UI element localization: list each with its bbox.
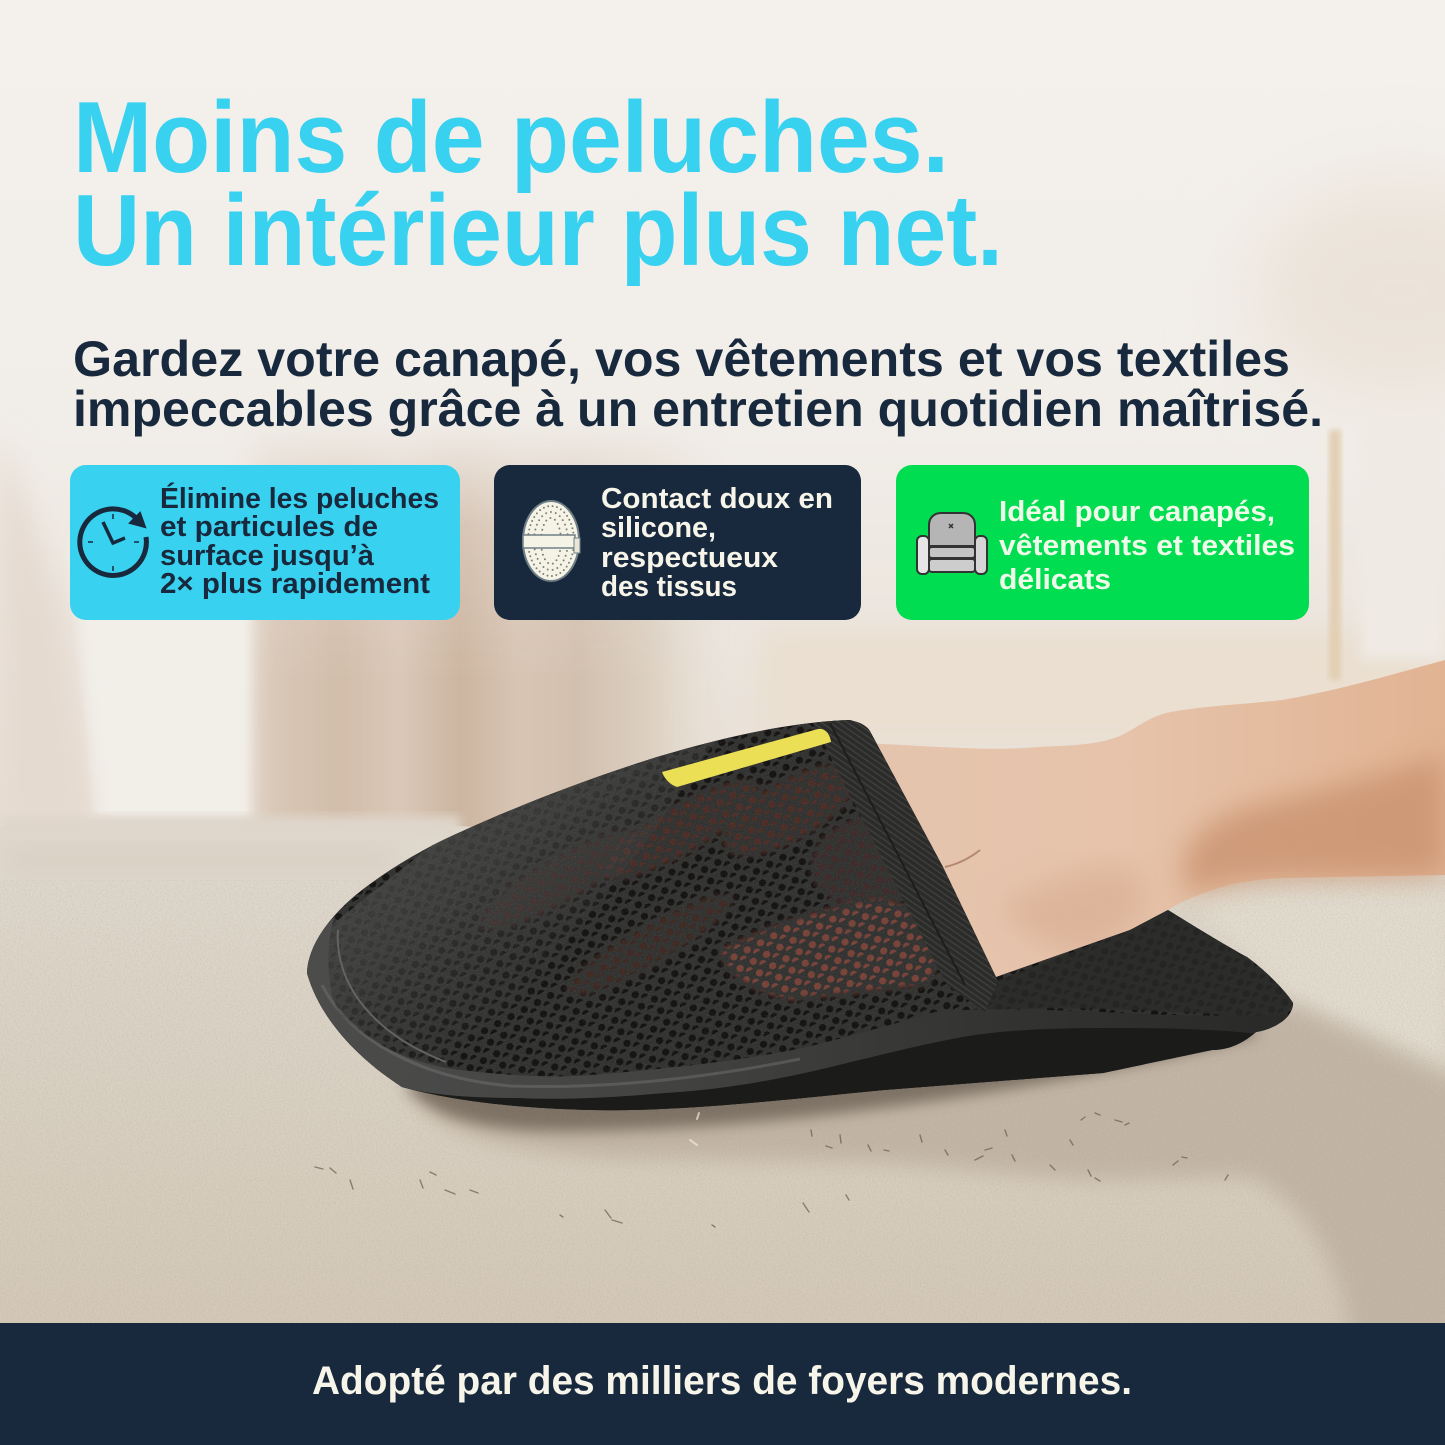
- panel: ideal for textiles: [896, 465, 1309, 620]
- panel: faster removal: [70, 465, 460, 620]
- subtitle: [73, 331, 1323, 437]
- curtain: pale panel: [70, 540, 250, 820]
- back palm knit texture: [985, 910, 1295, 1020]
- title: Un intérieur plus net.: [73, 175, 1003, 287]
- sofa seat: [0, 826, 1445, 1323]
- icon: armchair: [917, 513, 987, 574]
- wall: right beige band: [760, 630, 1445, 740]
- yellow tab on mitt: [662, 729, 831, 787]
- text: benefit 2: silicone,: [601, 512, 716, 544]
- hand and forearm: [860, 660, 1445, 978]
- sole: [400, 1028, 1272, 1110]
- hand crease: [945, 850, 980, 867]
- text: benefit 1: surface jusqu’à: [160, 540, 375, 572]
- hem stitch line: [830, 723, 965, 985]
- subtitle: Gardez votre canapé, vos vêtements et vos textiles: [73, 331, 1290, 387]
- sofa: right bright area: [1180, 890, 1445, 1060]
- panel: soft silicone: [494, 465, 861, 620]
- window frame post: [1329, 430, 1341, 680]
- sofa: fabric grain: [0, 880, 1445, 1323]
- dense knit on upper left: [300, 735, 720, 1070]
- sofa: soft seat edge: [0, 816, 460, 840]
- rim sheen: [322, 985, 800, 1087]
- text: benefit 2: respectueux: [601, 542, 778, 574]
- arm outline: [860, 660, 1445, 978]
- footer banner: [0, 1323, 1445, 1445]
- subtitle: impeccables grâce à un entretien quotidien maîtrisé.: [73, 381, 1323, 437]
- rim stitch line: [338, 930, 446, 1062]
- text: benefit 1: Élimine les peluches: [160, 481, 439, 515]
- text: benefit 2: des tissus: [601, 571, 737, 603]
- lint specks on sofa: [315, 1113, 1228, 1227]
- wall: right upper beige tone: [1250, 180, 1445, 400]
- icon: clock with arrow: [80, 509, 146, 575]
- knit texture: [330, 723, 1019, 1076]
- hem band: [813, 718, 998, 1012]
- background photo: blurred room: [0, 177, 1445, 1323]
- curtain: warm folds: [251, 437, 697, 827]
- mitt base: [300, 710, 1300, 1120]
- text: benefit 3: Idéal pour canapés,: [999, 496, 1275, 528]
- wall: left shadow: [0, 430, 92, 825]
- sofa: band under edge: [0, 845, 400, 875]
- back palm panel: [985, 910, 1295, 1020]
- text: benefit 1: et particules de: [160, 511, 378, 543]
- title: Moins de peluches.: [73, 82, 949, 194]
- mitt cast shadow on sofa: [400, 1005, 1445, 1340]
- text: benefit 3: vêtements et textiles: [999, 530, 1295, 562]
- palm heel shading: [1000, 867, 1144, 953]
- rim binding: [307, 918, 1295, 1099]
- mesh holes: [300, 710, 1300, 1120]
- title: [73, 82, 1003, 287]
- mitt contact shadow: [405, 1020, 1260, 1131]
- wall: right pale glow: [1360, 420, 1445, 660]
- text: benefit 1: [160, 481, 439, 600]
- fingers visible through mesh: [482, 763, 938, 1004]
- forearm underside shading: [1183, 755, 1445, 895]
- text: benefit 3: délicats: [999, 564, 1111, 596]
- text: benefit 3: [999, 496, 1295, 596]
- text: benefit 2: Contact doux en: [601, 483, 833, 515]
- text: benefit 2: [601, 483, 833, 603]
- text: benefit 1: 2× plus rapidement: [160, 568, 430, 600]
- icon: silicone mitt: [523, 501, 580, 581]
- product: black mesh mitt: [300, 710, 1300, 1120]
- footer text: Adopté par des milliers de foyers modernes.: [312, 1359, 1132, 1403]
